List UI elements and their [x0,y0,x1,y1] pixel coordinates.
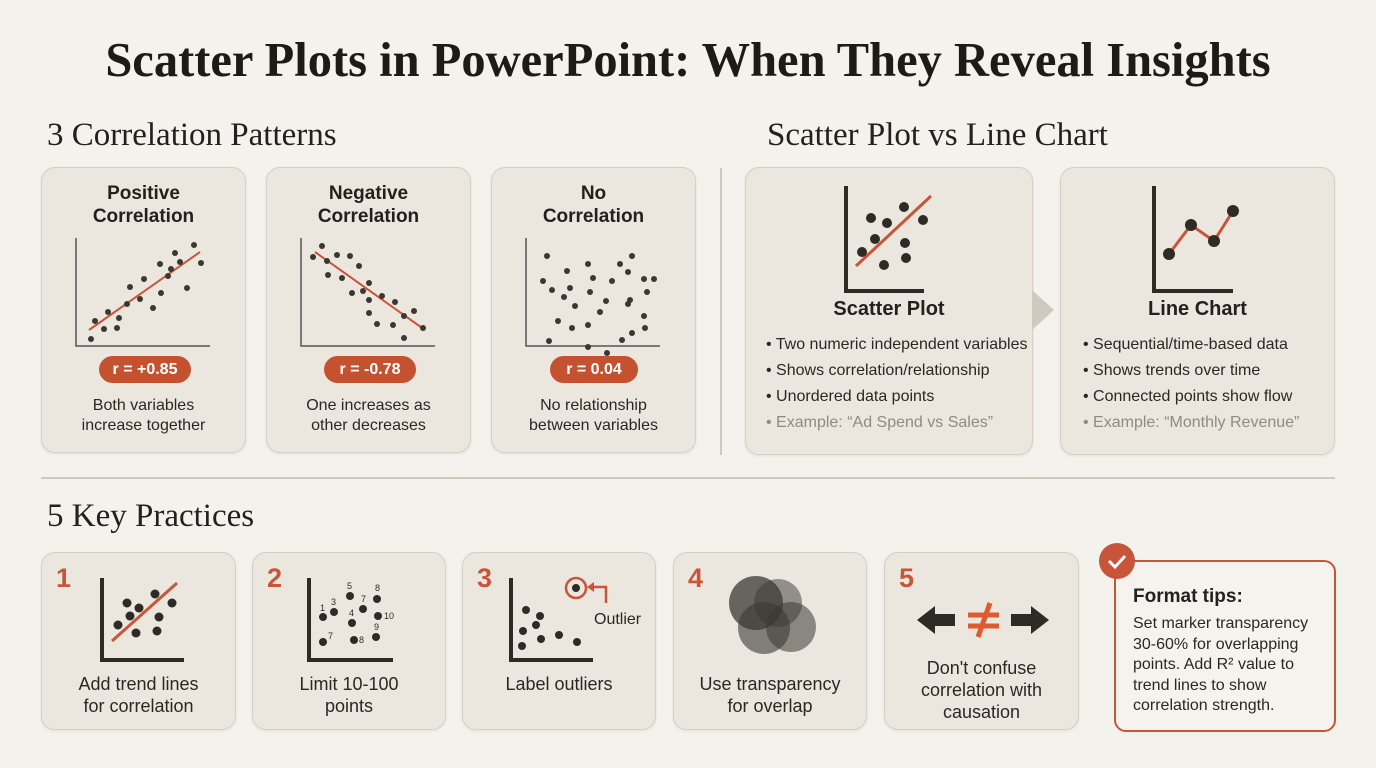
text: Add trend lines [78,674,199,694]
badge: r=0.04: r = 0.04 [566,361,622,378]
title: Scatter Plots in PowerPoint: When They Reveal Insights [105,34,1271,87]
panel: practice 1 [41,552,236,730]
number 1: 1 [56,563,71,593]
icon: numbered points: 7 [328,631,333,641]
text: description [306,397,431,434]
heading: no correlation [543,183,644,227]
icon: outlier [509,576,642,662]
list: scatter bullets: • Example: “Ad Spend vs Sales” [766,414,993,431]
text: Don't confuse [927,658,1036,678]
chart: random scatter [525,238,660,356]
panel: negative correlation [266,167,471,453]
heading: positive [93,183,194,227]
number 5: 5 [899,563,914,593]
text: tips: points. Add R² value to [1133,656,1294,673]
icon: numbered points: 9 [374,622,379,632]
text: description [82,397,206,434]
text: tips: trend lines to show [1133,676,1266,694]
list: scatter bullets [766,336,1027,431]
icon: numbered points: 7 [361,594,366,604]
panel: practice 2 [252,552,446,730]
badge: r=-0.78 [324,356,416,383]
list: line bullets: • Connected points show flow [1083,388,1292,405]
heading: positive: Correlation [93,206,194,227]
list: line bullets [1083,336,1299,431]
icon: numbered points: 8 [359,635,364,645]
text: description: No relationship [540,397,647,414]
text [921,658,1042,722]
list: line bullets: • Example: “Monthly Revenue” [1083,414,1299,431]
heading: no correlation: No [581,183,606,204]
icon: numbered points [307,578,394,662]
heading: positive: Positive [107,183,180,204]
list: scatter bullets: • Shows correlation/relationship [766,362,990,379]
text: points [325,696,373,716]
text [78,674,199,716]
heading: Format tips: Format tips: [1133,586,1243,607]
icon: numbered points: 4 [349,608,354,618]
icon: line chart [1152,186,1239,293]
text: description: between variables [529,417,658,434]
panel: no correlation [491,167,696,453]
icon: check badge [1099,543,1135,579]
icon: overlapping circles [729,576,816,654]
text: tips: Set marker transparency [1133,615,1308,632]
badge: r=+0.85 [99,356,191,383]
icon: numbered points: 1 [320,603,325,613]
heading: Line Chart: Line Chart [1148,298,1247,320]
icon: numbered points: 10 [384,611,394,621]
text: Label outliers [505,674,613,694]
text: tips [1133,615,1308,714]
text: description: One increases as [306,397,431,414]
badge: r=-0.78: r = -0.78 [340,361,400,378]
chart: negative scatter [300,238,435,347]
heading: negative: Correlation [318,206,419,227]
text: description: increase together [82,417,205,434]
icon: outlier: Outlier [594,611,642,628]
text: tips: 30-60% for overlapping [1133,636,1298,652]
heading: Scatter Plot vs Line Chart: Scatter Plot vs Line Chart [767,117,1108,153]
chart: positive scatter [75,238,210,347]
text: description: other decreases [311,417,426,434]
text: Use transparency [699,674,841,694]
heading: negative [318,183,419,227]
heading: 5 Key Practices: 5 Key Practices [47,498,254,534]
text: description [529,397,658,434]
text: description: Both variables [93,397,194,414]
text: Limit 10-100 [299,674,399,694]
list: line bullets: • Sequential/time-based data [1083,336,1288,353]
number 4: 4 [688,563,703,593]
number 3: 3 [477,563,492,593]
panel: practice 5 [884,552,1079,730]
panel: line chart [1060,167,1335,455]
panel: practice 4 [673,552,867,730]
panel: practice 3 [462,552,656,730]
heading: 3 Correlation Patterns: 3 Correlation Patterns [47,117,337,153]
panel: positive correlation [41,167,246,453]
callout: format tips [1114,560,1336,732]
panel: scatter plot [745,167,1033,455]
number 2: 2 [267,563,282,593]
badge: r=0.04 [550,356,638,383]
icon: trend line [100,578,184,662]
icon: numbered points: 5 [347,581,352,591]
heading: Scatter Plot: Scatter Plot [833,298,945,320]
list: scatter bullets: • Unordered data points [766,388,934,405]
icon: numbered points: 3 [331,597,336,607]
icon: numbered points: 8 [375,583,380,593]
text: for overlap [727,696,813,716]
icon: not-equal arrows [917,602,1049,638]
badge: r=+0.85: r = +0.85 [113,361,177,378]
list: line bullets: • Shows trends over time [1083,362,1260,379]
text [699,674,841,716]
heading: no correlation: Correlation [543,206,644,227]
icon: scatter plot with trend [844,186,932,293]
text [299,674,399,716]
text: tips: correlation strength. [1133,697,1274,714]
text: causation [943,702,1020,722]
text: for correlation [83,696,194,716]
heading: negative: Negative [329,183,408,204]
list: scatter bullets: • Two numeric independent variables [766,336,1027,353]
text: correlation with [921,680,1042,700]
arrow: comparison [1033,291,1054,329]
